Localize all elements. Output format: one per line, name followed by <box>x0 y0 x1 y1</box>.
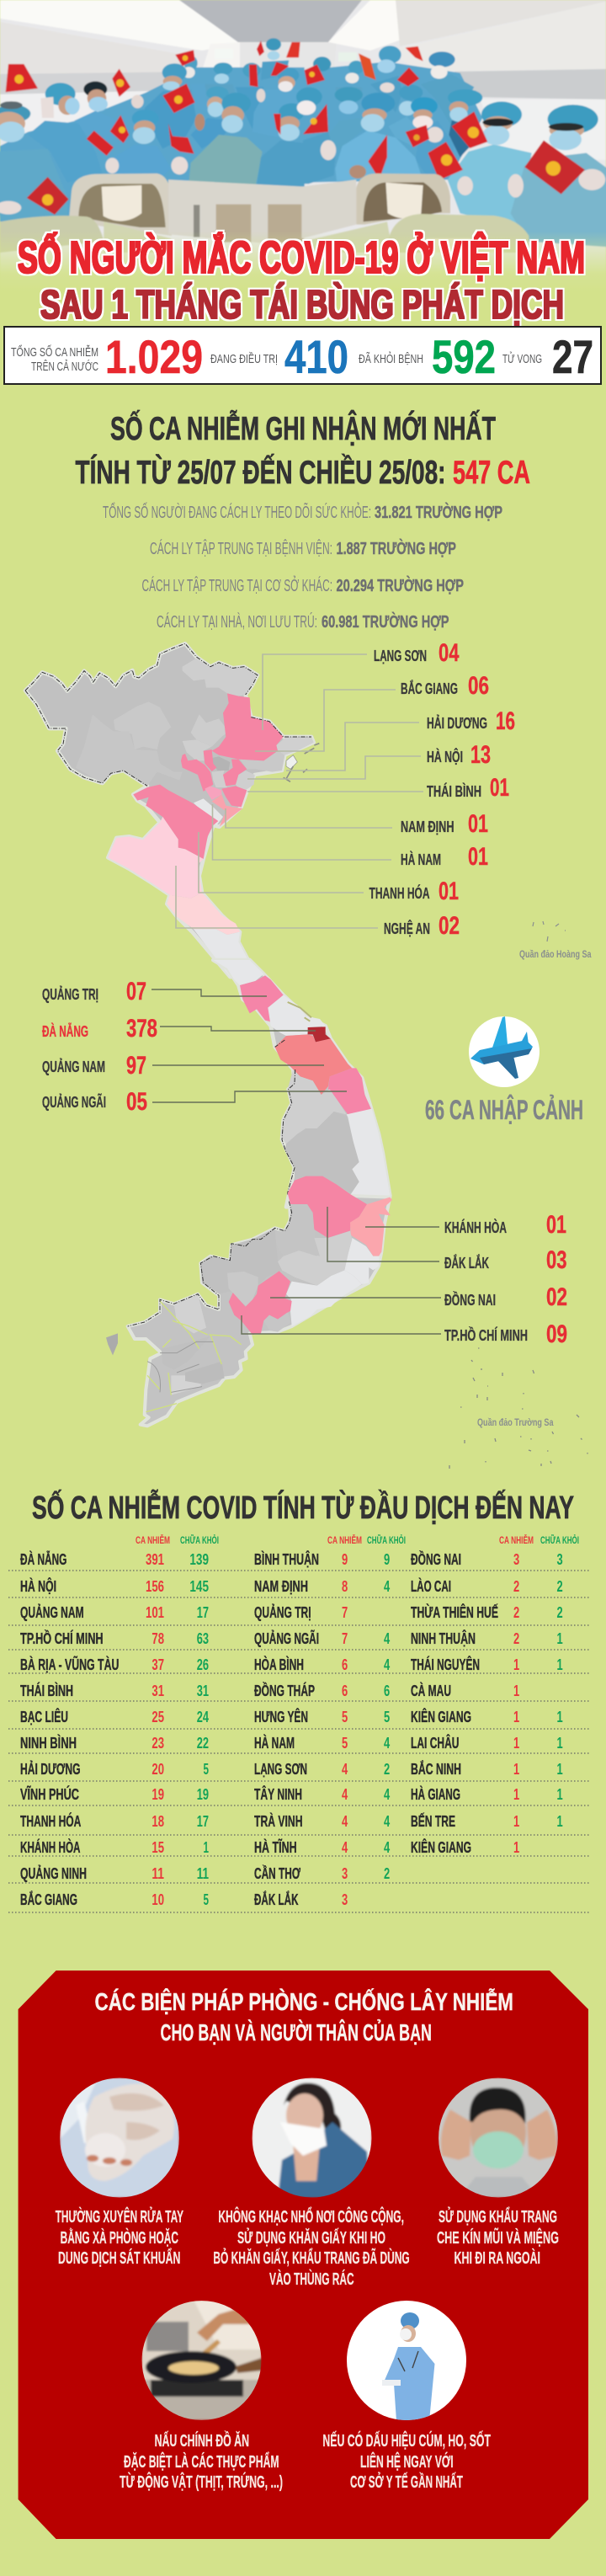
caption: wear a mask: KHI ĐI RA NGOÀI <box>454 2248 540 2268</box>
table column 2: 4 <box>384 1786 390 1803</box>
table column 1: HẢI DƯƠNG <box>20 1760 81 1778</box>
quarantine statistics: 1.887 TRƯỜNG HỢP <box>337 538 456 558</box>
icon: airplane in white circle <box>469 1016 540 1087</box>
table column 2: QUẢNG NGÃI <box>254 1629 319 1647</box>
caption: hand washing: DUNG DỊCH SÁT KHUẨN <box>58 2248 180 2268</box>
table column 1: 24 <box>197 1709 209 1725</box>
table column 1: 1 <box>204 1839 209 1856</box>
table column headers <box>136 1533 579 1546</box>
title <box>18 232 585 328</box>
table column 2: 4 <box>384 1578 390 1595</box>
islands: Hoàng Sa <box>519 921 592 960</box>
table column 1: BÀ RỊA - VŨNG TÀU <box>20 1656 119 1673</box>
stats box: 1.029 <box>105 330 203 383</box>
table column 1: QUẢNG NAM <box>20 1603 84 1621</box>
province labels: central left: QUẢNG NAM <box>42 1058 105 1075</box>
province labels: central left: 05 <box>126 1088 147 1116</box>
table column 2: NAM ĐỊNH <box>254 1578 308 1595</box>
table column 1: ĐÀ NẴNG <box>20 1550 66 1568</box>
quarantine statistics: CÁCH LY TẬP TRUNG TẠI CƠ SỞ KHÁC: <box>141 575 332 595</box>
province labels: north: 01 <box>468 843 488 871</box>
province labels: south right: TP.HỒ CHÍ MINH <box>444 1326 528 1344</box>
stats box: ĐANG ĐIỀU TRỊ <box>210 352 278 366</box>
province labels: north: 13 <box>470 741 491 769</box>
table column 2: 5 <box>342 1709 348 1725</box>
table column 2: TÂY NINH <box>254 1785 302 1803</box>
heading: latest cases <box>76 409 530 491</box>
table column 3: 3 <box>557 1551 563 1568</box>
table column 2 <box>254 1550 390 1908</box>
table column 2: 9 <box>342 1551 348 1568</box>
table column 2: 4 <box>384 1839 390 1856</box>
table column 1: BẮC GIANG <box>20 1891 77 1908</box>
province labels: north: 16 <box>496 707 515 735</box>
table column 2: HÒA BÌNH <box>254 1656 304 1673</box>
table column 1: 26 <box>197 1656 209 1673</box>
table column 3: NINH THUẬN <box>411 1629 476 1647</box>
table column 2: 3 <box>342 1865 348 1882</box>
panel heading: CHO BẠN VÀ NGƯỜI THÂN CỦA BẠN <box>160 2019 432 2045</box>
table column 1: 11 <box>152 1865 164 1882</box>
table column 2: HƯNG YÊN <box>254 1708 308 1725</box>
province labels: south right: 09 <box>546 1320 567 1348</box>
islands: Trường Sa: Quần đảo Trường Sa <box>477 1416 554 1428</box>
stats box: TỬ VONG <box>502 351 542 366</box>
table column 1: 37 <box>152 1656 164 1673</box>
table column 1: 5 <box>204 1761 209 1778</box>
province labels: south right <box>444 1211 567 1348</box>
quarantine statistics: CÁCH LY TẠI NHÀ, NƠI LƯU TRÚ: <box>157 612 317 632</box>
table column 1: KHÁNH HÒA <box>20 1838 81 1856</box>
leader lines north <box>176 654 423 928</box>
table column 2: 7 <box>342 1630 348 1647</box>
table column 3: 1 <box>513 1786 519 1803</box>
table column 2: ĐỒNG THÁP <box>254 1682 315 1699</box>
caption: hand washing <box>56 2206 183 2268</box>
table column 2: HÀ NAM <box>254 1734 295 1752</box>
table column 3: CÀ MAU <box>411 1682 451 1699</box>
table column 1: 17 <box>197 1813 209 1830</box>
province labels: north: 04 <box>439 639 460 667</box>
caption: no spitting: SỬ DỤNG KHĂN GIẤY KHI HO <box>237 2227 385 2248</box>
quarantine statistics: CÁCH LY TẬP TRUNG TẠI BỆNH VIỆN: <box>150 539 332 558</box>
table column 2: 5 <box>384 1709 390 1725</box>
table column 3: LAI CHÂU <box>411 1734 460 1752</box>
table column 2: 2 <box>384 1865 390 1882</box>
table column 1: 19 <box>152 1786 164 1803</box>
table column 1: VĨNH PHÚC <box>20 1785 79 1803</box>
left half figures <box>0 38 305 253</box>
photo: cooking in a pan <box>141 2300 262 2420</box>
table column 3: 1 <box>557 1813 563 1830</box>
table column 2: 7 <box>342 1604 348 1621</box>
caption: contact medical facility <box>322 2430 491 2492</box>
table column 3 <box>411 1550 563 1856</box>
table column 1: 18 <box>152 1813 164 1830</box>
province labels: central left: 378 <box>126 1015 157 1043</box>
table column 3: 1 <box>513 1683 519 1699</box>
province labels: central left: 97 <box>126 1052 146 1080</box>
table column 1: NINH BÌNH <box>20 1734 77 1752</box>
province labels: central left: QUẢNG TRỊ <box>42 985 98 1003</box>
table column headers: CA NHIỄM <box>499 1533 534 1546</box>
table column 3: 2 <box>513 1604 519 1621</box>
table column 3: 1 <box>513 1709 519 1725</box>
table column 3: 1 <box>557 1709 563 1725</box>
stats box: TỔNG SỐ CA NHIỄM <box>11 344 98 360</box>
table column 3: 1 <box>513 1839 519 1856</box>
province labels: south right: 02 <box>546 1283 567 1311</box>
table column 2: 2 <box>384 1761 390 1778</box>
province labels: north: NGHỆ AN <box>384 920 430 937</box>
table column 1: 156 <box>146 1578 164 1595</box>
leader lines south <box>152 989 441 1334</box>
province labels: north: 01 <box>439 877 459 905</box>
province labels: north: HẢI DƯƠNG <box>427 714 487 732</box>
map: central provinces <box>213 960 390 1213</box>
table column 2: 4 <box>342 1786 348 1803</box>
table column headers: CHỮA KHỎI <box>180 1533 219 1546</box>
caption: no spitting: KHÔNG KHẠC NHỔ NƠI CÔNG CỘNG, <box>218 2206 404 2227</box>
table column 1: 78 <box>152 1630 164 1647</box>
quarantine statistics <box>103 502 502 632</box>
caption: no spitting: BỎ KHĂN GIẤY, KHẨU TRANG ĐÃ DÙNG <box>213 2248 410 2268</box>
table column 3: 1 <box>557 1786 563 1803</box>
map: northern provinces <box>25 643 319 977</box>
heading: latest cases: TÍNH TỪ 25/07 ĐẾN CHIỀU 25/08: <box>76 454 446 491</box>
photo: washing hands <box>60 2077 179 2198</box>
table column headers: CHỮA KHỎI <box>540 1533 579 1546</box>
table column 1: TP.HỒ CHÍ MINH <box>20 1629 104 1647</box>
table column 3: 1 <box>557 1761 563 1778</box>
table column 3: LÀO CAI <box>411 1577 451 1595</box>
table column 3: KIÊN GIANG <box>411 1838 471 1856</box>
table column 3: BẮC NINH <box>411 1760 461 1778</box>
table column 2: LẠNG SƠN <box>254 1761 307 1778</box>
table column 1: 31 <box>197 1683 209 1699</box>
province labels: north: HÀ NỘI <box>427 748 463 765</box>
table column 2: HÀ TĨNH <box>254 1838 297 1856</box>
caption: cook thoroughly: ĐẶC BIỆT LÀ CÁC THỰC PHẨM <box>124 2451 279 2472</box>
table column 2: TRÀ VINH <box>254 1812 303 1830</box>
table column 1: 25 <box>152 1709 164 1725</box>
caption: cook thoroughly: NẤU CHÍNH ĐỒ ĂN <box>155 2430 249 2451</box>
quarantine statistics: 31.821 TRƯỜNG HỢP <box>375 502 502 522</box>
province labels: north: THÁI BÌNH <box>427 782 481 800</box>
table column 2: 6 <box>384 1683 390 1699</box>
quarantine statistics: 20.294 TRƯỜNG HỢP <box>337 575 464 595</box>
province labels: central left <box>42 978 157 1116</box>
caption: hand washing: BẰNG XÀ PHÒNG HOẶC <box>61 2227 178 2248</box>
table column 2: 4 <box>384 1656 390 1673</box>
table column 1: 139 <box>189 1551 209 1568</box>
table column 1: THANH HÓA <box>20 1812 81 1830</box>
table column 3: KIÊN GIANG <box>411 1708 471 1725</box>
table column 1: 31 <box>152 1683 164 1699</box>
table column headers: CA NHIỄM <box>327 1533 362 1546</box>
table column 1: 101 <box>146 1604 164 1621</box>
caption: contact medical facility: CƠ SỞ Y TẾ GẦN NHẤT <box>350 2472 463 2492</box>
caption: contact medical facility: NẾU CÓ DẤU HIỆU CÚM, HO, SỐT <box>322 2430 491 2451</box>
stats box <box>4 327 601 384</box>
table column 1: BẠC LIÊU <box>20 1708 68 1725</box>
table column 3: 2 <box>557 1604 563 1621</box>
table column 2: 4 <box>384 1630 390 1647</box>
table column headers: CHỮA KHỎI <box>367 1533 406 1546</box>
table column 1: THÁI BÌNH <box>20 1682 73 1699</box>
map of Vietnam <box>25 643 392 1426</box>
province labels: south right: KHÁNH HÒA <box>444 1219 507 1236</box>
table column 2: 3 <box>342 1891 348 1908</box>
province labels: north: BẮC GIANG <box>401 680 458 697</box>
table column 3: 1 <box>557 1656 563 1673</box>
table column 2: 6 <box>342 1683 348 1699</box>
province labels: north: THANH HÓA <box>369 884 429 902</box>
photo: man with face mask <box>438 2077 558 2198</box>
province labels: south right: 01 <box>546 1211 566 1239</box>
table column 1: QUẢNG NINH <box>20 1864 87 1882</box>
province labels: north: 02 <box>439 912 460 940</box>
province labels: central left: 07 <box>126 978 146 1005</box>
table column 1: 19 <box>197 1786 209 1803</box>
table column 3: 2 <box>513 1630 519 1647</box>
panel heading <box>94 1987 513 2045</box>
table column 2: CẦN THƠ <box>254 1864 300 1882</box>
table column 2: 4 <box>384 1735 390 1752</box>
province labels: north: 01 <box>490 774 509 802</box>
stats box: 592 <box>432 330 496 383</box>
quarantine statistics: TỔNG SỐ NGƯỜI ĐANG CÁCH LY THEO DÕI SỨC KHỎE: <box>103 502 371 522</box>
province labels: south right: ĐẮK LẮK <box>444 1254 489 1272</box>
table column 3: 1 <box>513 1735 519 1752</box>
table column 1: 5 <box>204 1891 209 1908</box>
stats box: 410 <box>284 330 348 383</box>
stats box: 27 <box>552 330 593 383</box>
table column 3: 1 <box>513 1656 519 1673</box>
caption: no spitting <box>213 2206 410 2289</box>
table column 3: 1 <box>557 1735 563 1752</box>
table column 3: 1 <box>513 1813 519 1830</box>
province labels: central left: ĐÀ NẴNG <box>42 1022 88 1040</box>
province labels: central left: QUẢNG NGÃI <box>42 1093 106 1111</box>
province labels: north: 06 <box>468 672 489 700</box>
islands: Trường Sa <box>449 1348 587 1469</box>
table column 1: 145 <box>189 1578 209 1595</box>
table column 2: ĐẮK LẮK <box>254 1891 298 1908</box>
hero photo: medical team with flags in aircraft cabin <box>0 0 606 291</box>
caption: cook thoroughly: TỪ ĐỘNG VẬT (THỊT, TRỨNG, ...) <box>120 2472 283 2492</box>
table column 1: 11 <box>197 1865 209 1882</box>
table column headers: CA NHIỄM <box>136 1533 170 1546</box>
right half figures <box>296 45 606 253</box>
province labels: north: LẠNG SƠN <box>374 648 427 664</box>
table column 3: 2 <box>513 1578 519 1595</box>
table column 2: 4 <box>342 1813 348 1830</box>
table column 1: 15 <box>152 1839 164 1856</box>
table column 1: 63 <box>197 1630 209 1647</box>
table column 2: 4 <box>384 1813 390 1830</box>
table column 1: 23 <box>152 1735 164 1752</box>
table column 2: 4 <box>342 1761 348 1778</box>
province labels: north <box>369 639 515 940</box>
province labels: north: NAM ĐỊNH <box>401 819 454 835</box>
province labels: north: HÀ NAM <box>401 851 441 868</box>
table column 2: QUẢNG TRỊ <box>254 1603 311 1621</box>
stats box: ĐÃ KHỎI BỆNH <box>359 351 423 366</box>
table column 3: 1 <box>557 1630 563 1647</box>
table column 3: BẾN TRE <box>411 1812 455 1830</box>
province labels: south right: ĐỒNG NAI <box>444 1291 496 1309</box>
panel: prevention measures <box>19 1971 588 2539</box>
table column 1: HÀ NỘI <box>20 1577 56 1595</box>
stats box: TRÊN CẢ NƯỚC <box>31 360 98 374</box>
caption: no spitting: VÀO THÙNG RÁC <box>269 2269 354 2289</box>
table column 3: THÁI NGUYÊN <box>411 1656 480 1673</box>
table column 3: 2 <box>557 1578 563 1595</box>
caption: wear a mask <box>437 2206 559 2268</box>
province labels: south right: 03 <box>546 1246 567 1274</box>
table column 1: 391 <box>146 1551 164 1568</box>
province labels: north: 01 <box>468 810 488 838</box>
table column 3: 3 <box>513 1551 519 1568</box>
table column 3: THỪA THIÊN HUẾ <box>411 1603 498 1621</box>
table row separators <box>8 1571 591 1912</box>
table column 1 <box>20 1550 209 1908</box>
seats left <box>69 173 172 236</box>
photo: doctor in gown <box>346 2300 467 2421</box>
table column 2: 6 <box>342 1656 348 1673</box>
map: southern provinces <box>106 1176 392 1426</box>
caption: cook thoroughly <box>120 2430 283 2492</box>
table column 2: 4 <box>342 1839 348 1856</box>
table column 1: 10 <box>152 1891 164 1908</box>
heading: latest cases: 547 CA <box>453 455 530 491</box>
table column 2: 9 <box>384 1551 390 1568</box>
table column 2: 8 <box>342 1578 348 1595</box>
table column 2: 5 <box>342 1735 348 1752</box>
quarantine statistics: 60.981 TRƯỜNG HỢP <box>322 611 449 632</box>
table column 1: 22 <box>197 1735 209 1752</box>
table column 3: HÀ GIANG <box>411 1785 460 1803</box>
table column 3: ĐỒNG NAI <box>411 1550 461 1568</box>
table column 3: 1 <box>513 1761 519 1778</box>
table column 2: BÌNH THUẬN <box>254 1550 319 1568</box>
caption: contact medical facility: LIÊN HỆ NGAY VỚI <box>360 2451 454 2472</box>
table column 1: 17 <box>197 1604 209 1621</box>
caption: hand washing: THƯỜNG XUYÊN RỬA TAY <box>56 2206 183 2227</box>
photo: covering a sneeze <box>252 2077 372 2198</box>
table column 1: 20 <box>152 1761 164 1778</box>
